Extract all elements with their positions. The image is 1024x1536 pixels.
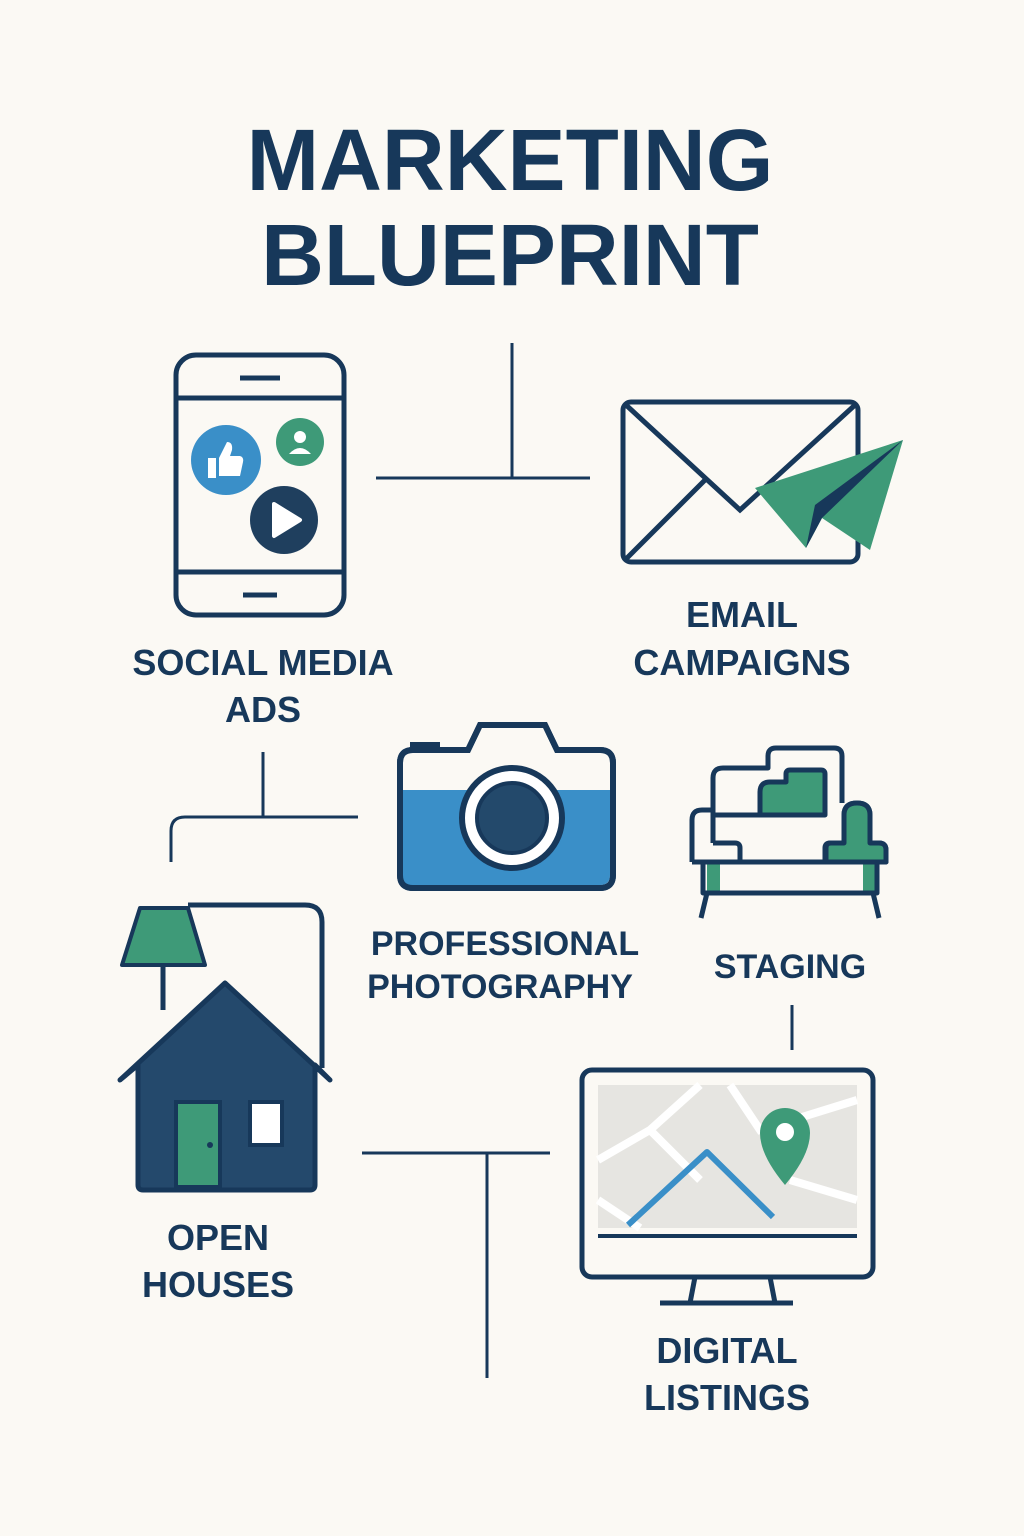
icon: camera: [400, 725, 613, 888]
title: BLUEPRINT: [261, 207, 759, 304]
label: email campaigns: EMAIL: [686, 594, 798, 635]
icon: lamp and house: [120, 905, 330, 1190]
label: digital listings: LISTINGS: [644, 1377, 810, 1418]
label: social media ads: SOCIAL MEDIA: [132, 642, 394, 683]
label: email campaigns: CAMPAIGNS: [633, 642, 851, 683]
icon: phone: [176, 355, 344, 615]
label: open houses: OPEN: [167, 1217, 269, 1258]
label: email campaigns: [633, 594, 851, 683]
title: [247, 112, 773, 304]
label: digital listings: DIGITAL: [656, 1330, 798, 1371]
label: social media ads: ADS: [225, 689, 301, 730]
label: professional photography: [367, 925, 639, 1006]
label: open houses: [142, 1217, 294, 1305]
icon: staging sofa: [692, 748, 886, 918]
title: MARKETING: [247, 112, 773, 209]
icon: monitor map: [582, 1070, 873, 1303]
icon: email: [623, 402, 903, 562]
label: staging: STAGING: [714, 948, 866, 986]
label: professional photography: PROFESSIONAL: [371, 925, 639, 963]
label: social media ads: [132, 642, 394, 730]
label: digital listings: [644, 1330, 810, 1418]
label: open houses: HOUSES: [142, 1264, 294, 1305]
label: professional photography: PHOTOGRAPHY: [367, 968, 633, 1006]
